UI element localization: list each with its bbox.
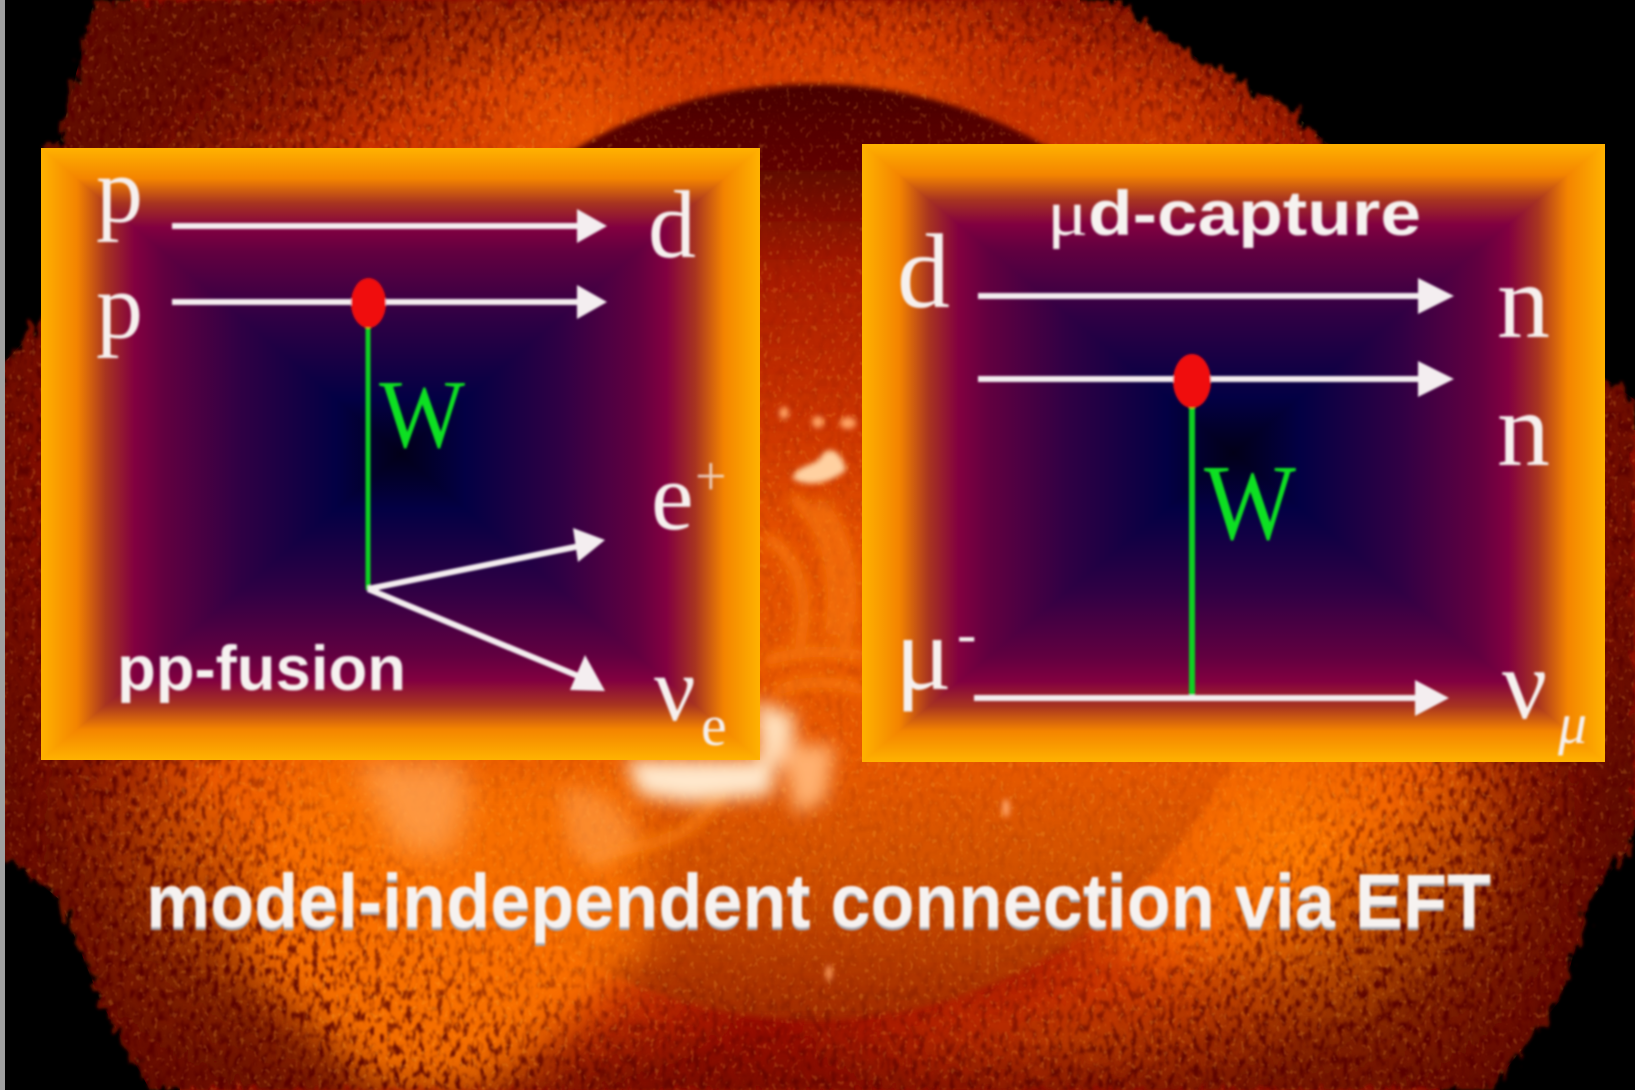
bright blob between the panels [792,450,846,483]
label: d: d [648,171,696,278]
label: plus sign: + [695,446,727,508]
arrow: muon to neutrino [974,680,1449,716]
caption text: model-independent connection via EFT [146,859,1491,944]
bright left streak [355,762,470,855]
caption shadow: model-independent connection via EFT [146,862,1491,947]
label: subscript e: e [701,693,727,758]
solar disk [345,84,1281,1020]
orange streak over lower left limb [240,770,650,1085]
label: nu: ν [1502,629,1547,740]
label: pp-fusion: pp-fusion [117,634,406,704]
arrow: second n [978,361,1454,397]
label: e plus: e [651,443,694,550]
panel: mu-d capture [862,144,1605,762]
vertex dot [351,278,386,328]
heading: mu-d capture: μd-capture [1047,177,1421,250]
label: n top: n [1497,243,1550,360]
feynman diagram: mu-d capture [895,177,1587,756]
panel background [862,144,1605,762]
white flare core [560,700,835,870]
panel: pp-fusion [41,139,760,760]
label: mu minus: μ [895,595,952,712]
active region loops [590,500,860,860]
feynman diagram: pp-fusion [96,139,727,758]
label: n bottom: n [1497,371,1550,488]
label: p bottom: p [96,255,143,359]
W boson line [1189,390,1195,698]
caption [146,859,1491,947]
vertex dot [1173,354,1211,408]
left edge strip [0,0,5,1090]
arrow: p to p [172,285,607,319]
W boson line [366,310,370,590]
arrow: positron [368,528,605,589]
label: nu: ν [654,638,696,740]
arrow: p to d [172,209,607,243]
panel background [41,148,760,760]
label: W: W [379,361,465,469]
label: d: d [897,213,950,330]
small hot spots [779,407,1010,981]
label: W: W [1204,444,1296,563]
label: subscript mu: μ [1557,691,1587,756]
label: p top: p [96,139,143,243]
label: minus sign: - [957,601,976,666]
arrow: d to n [978,278,1454,314]
arrow: neutrino [368,589,605,691]
